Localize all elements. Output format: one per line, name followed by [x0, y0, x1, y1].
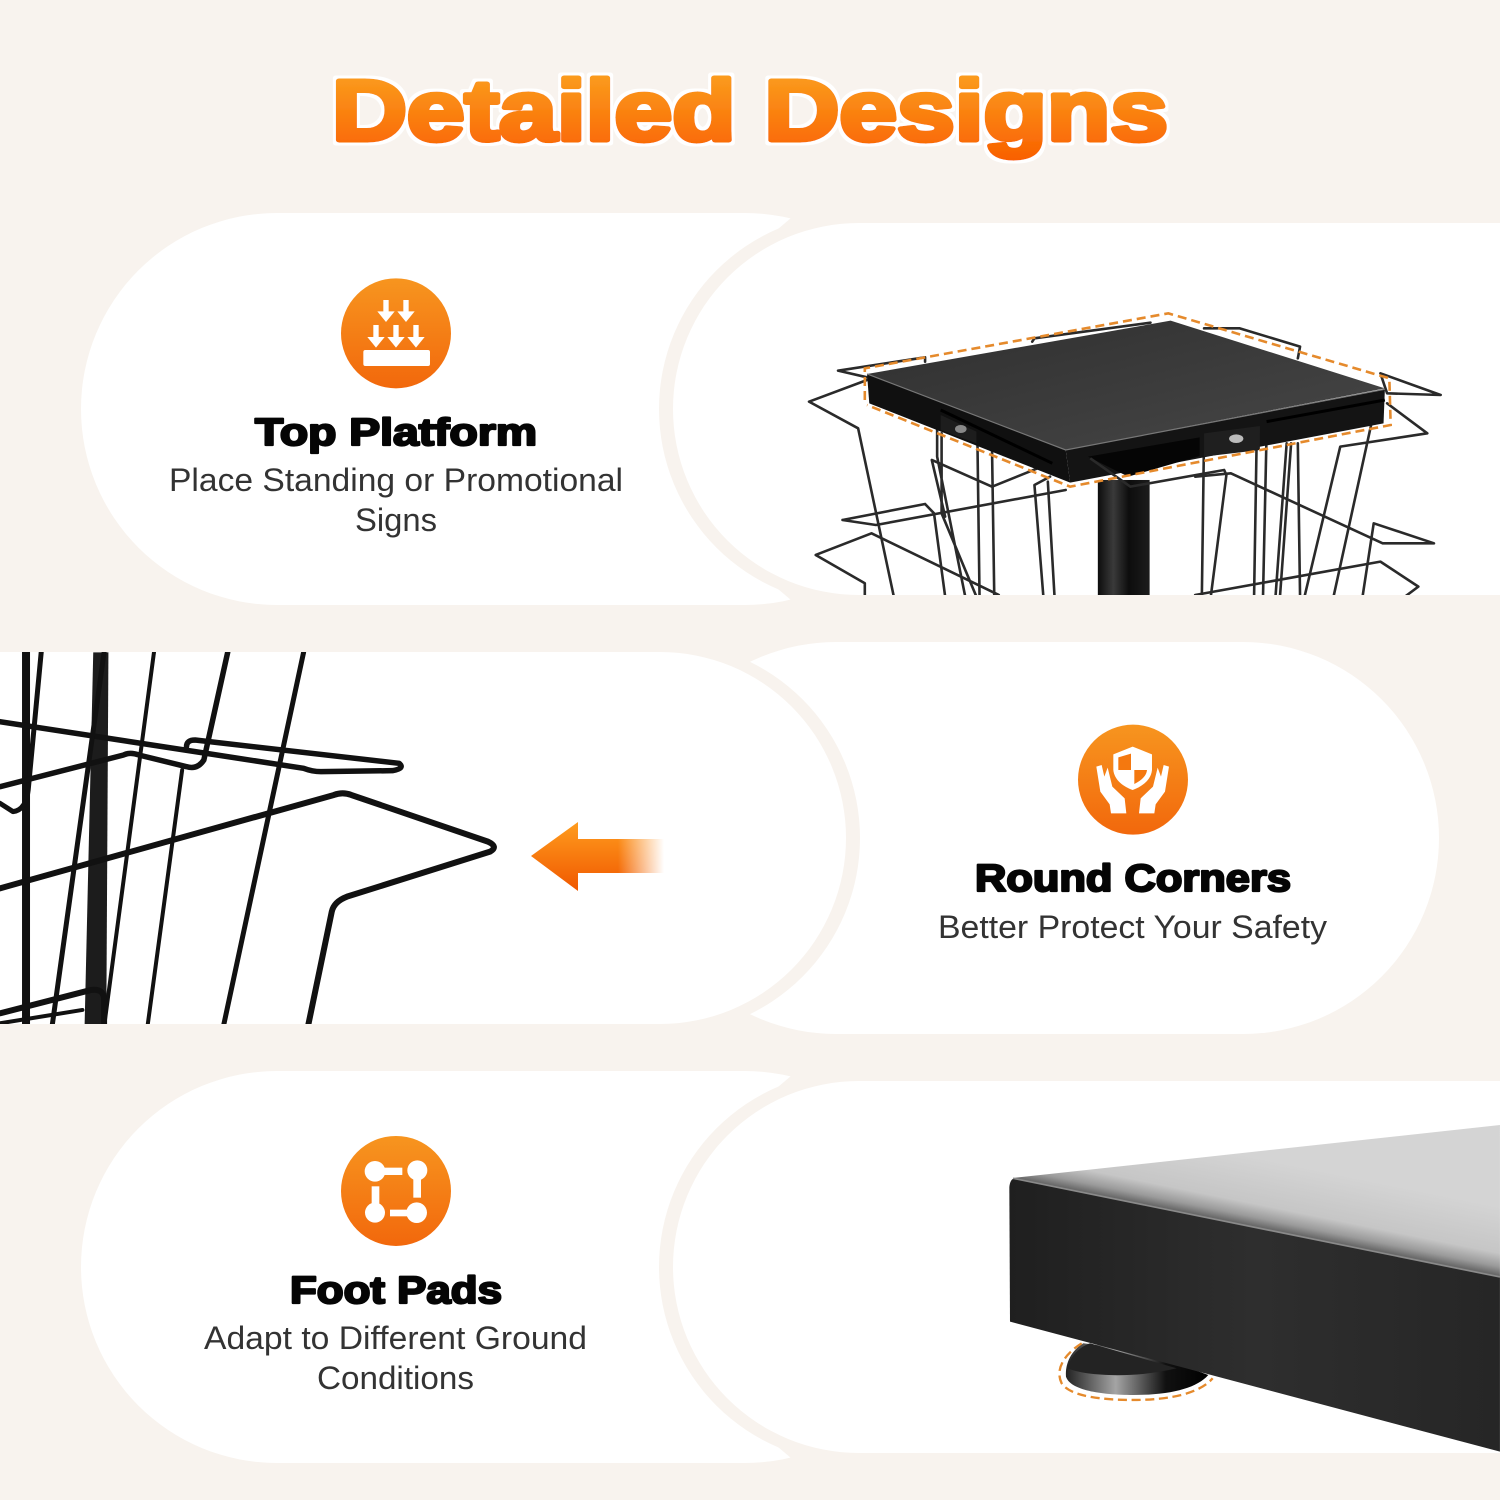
heading: top platform: Top Platform [255, 412, 537, 454]
heading: foot pads: Foot Pads [290, 1270, 502, 1312]
dashed outline: platform highlight [865, 313, 1391, 487]
title: Detailed Designs [332, 64, 1168, 159]
text: foot pads description: Conditions [317, 1360, 474, 1396]
panel: round corners [0, 642, 1439, 1034]
panel: top platform [81, 213, 1500, 605]
product image: base corner and foot pad [1009, 1125, 1500, 1452]
icon: connected corner nodes [341, 1136, 451, 1246]
text: round corners description: Better Protect Your Safety [938, 909, 1327, 945]
panel: foot pads [81, 1071, 1500, 1463]
text: top platform description: Signs [355, 502, 437, 538]
heading: round corners: Round Corners [975, 858, 1291, 900]
product image: rounded wire corner [0, 652, 494, 1027]
text: top platform description: Place Standing or Promotional [169, 462, 623, 498]
text: foot pads description: Adapt to Different Ground [204, 1320, 587, 1356]
icon: arrows pressing on platform [341, 278, 451, 388]
foot pad [1059, 1343, 1213, 1400]
arrow: pointing to rounded corner [531, 822, 664, 891]
product image: top platform with wire racks [809, 313, 1441, 600]
icon: shield held by hands [1078, 725, 1188, 835]
